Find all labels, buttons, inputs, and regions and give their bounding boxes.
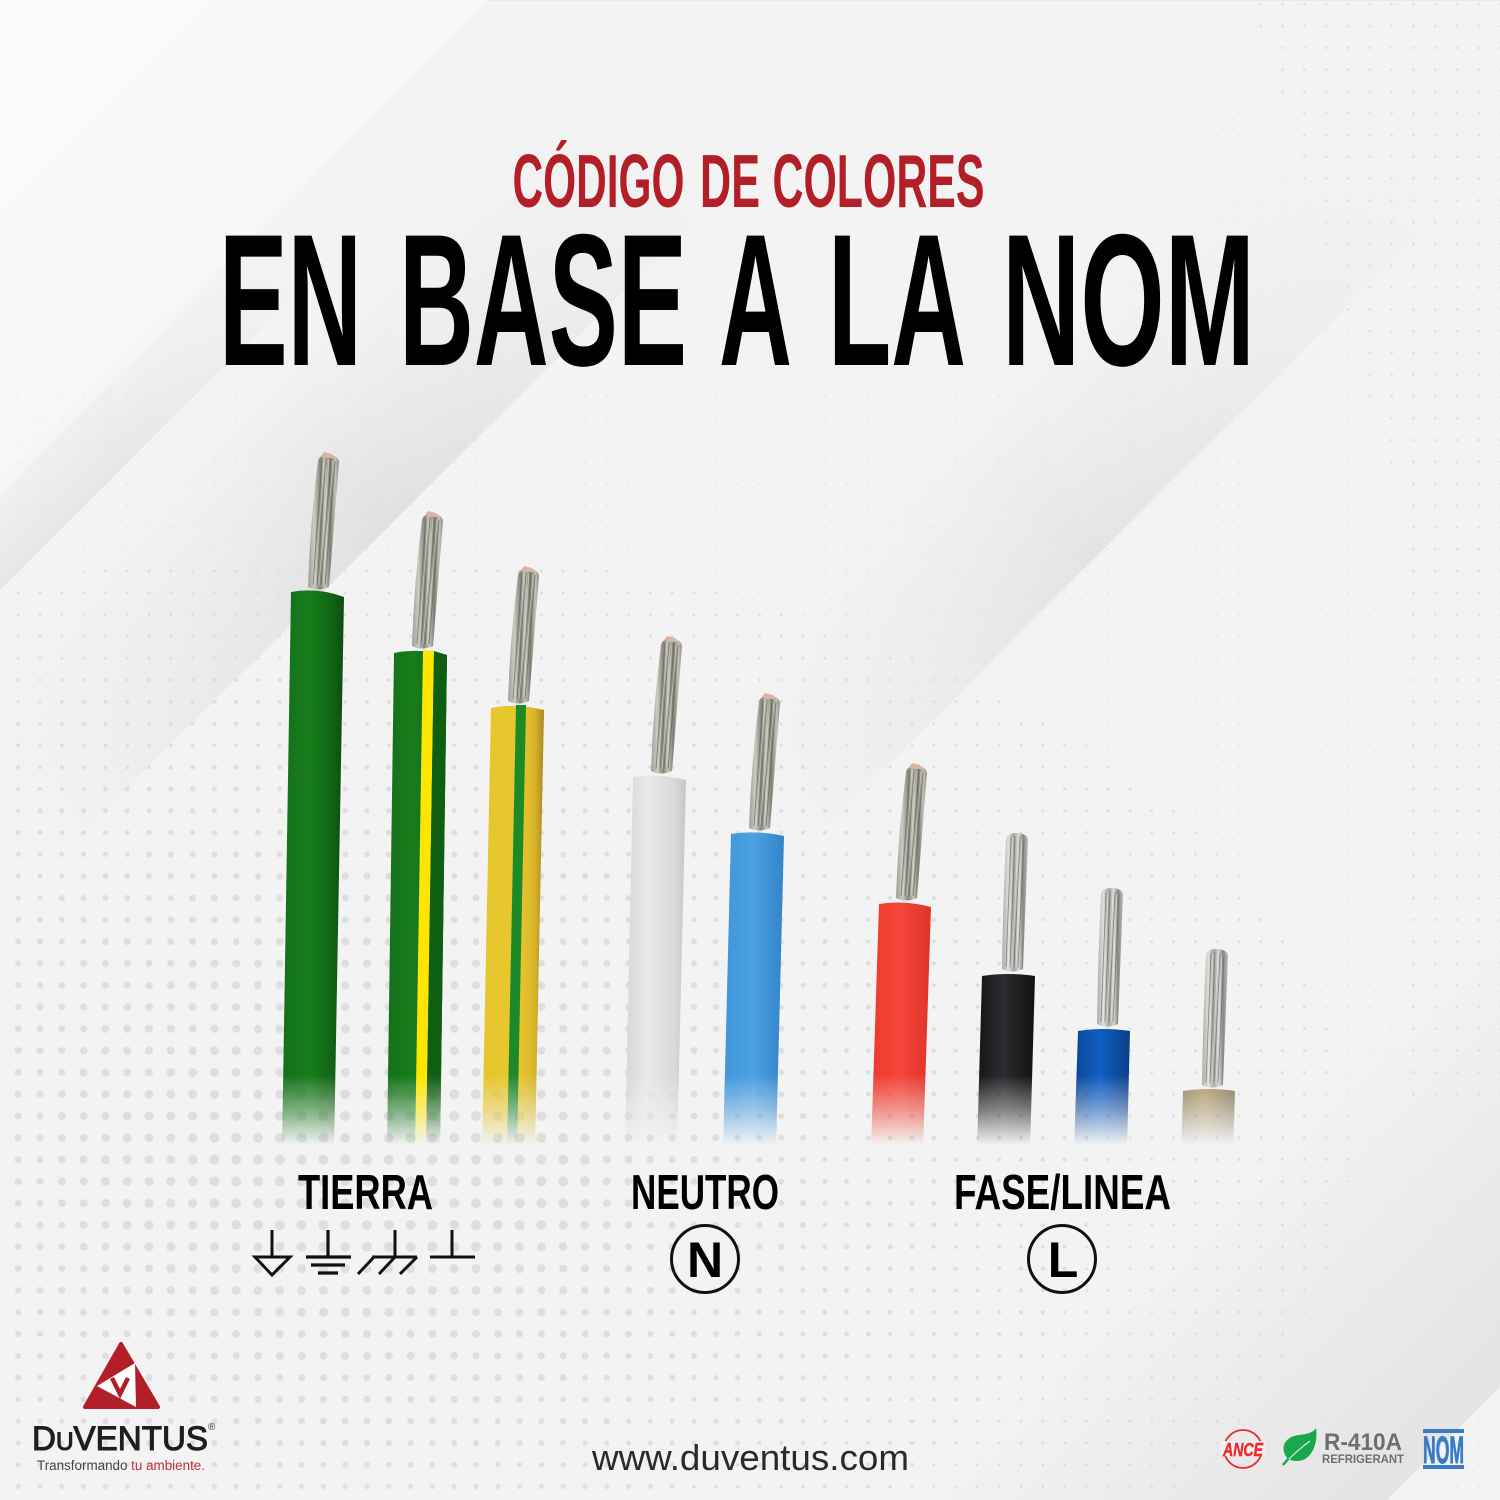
icon: n in circle xyxy=(672,1226,738,1292)
title: en base a la nom: NOM xyxy=(1002,195,1255,405)
cable: green with yellow stripe xyxy=(387,511,447,1150)
label: tierra: TIERRA xyxy=(298,1166,433,1220)
title: en base a la nom: A xyxy=(719,195,792,405)
icon: n in circle: N xyxy=(687,1232,723,1288)
badge: nom xyxy=(1423,1429,1464,1472)
title: código de colores: CÓDIGO xyxy=(512,139,684,223)
duventus logo xyxy=(32,1344,216,1473)
icon: ground symbols xyxy=(255,1230,475,1275)
cable: white xyxy=(625,636,686,1150)
label: fase/linea: FASE/LINEA xyxy=(954,1166,1171,1220)
icon: l in circle: L xyxy=(1048,1232,1078,1288)
title: en base a la nom: LA xyxy=(828,195,966,405)
title: en base a la nom: BASE xyxy=(399,195,687,405)
title: código de colores xyxy=(512,139,984,223)
badge: r-410a: R-410A xyxy=(1324,1429,1402,1456)
website url: www.duventus.com xyxy=(591,1437,909,1478)
badge: ance xyxy=(1221,1430,1265,1468)
cable: tan xyxy=(1181,949,1235,1155)
cable: light blue xyxy=(723,693,784,1150)
label: neutro: NEUTRO xyxy=(631,1166,779,1220)
tagline: Transformando tu ambiente. xyxy=(37,1458,205,1473)
badge: ance: ANCE xyxy=(1222,1440,1264,1460)
brand name: DUVENTUS xyxy=(32,1420,208,1458)
cable: dark blue xyxy=(1074,888,1130,1150)
title: en base a la nom: EN xyxy=(219,195,362,405)
title: en base a la nom xyxy=(219,195,1255,405)
cable: red xyxy=(871,763,931,1150)
icon: green leaf xyxy=(1283,1428,1316,1465)
badge: r-410a xyxy=(1322,1429,1405,1466)
cable: green xyxy=(282,452,344,1150)
icon: red triangle xyxy=(85,1344,158,1407)
registered mark: ® xyxy=(208,1422,216,1433)
cable samples xyxy=(282,452,1235,1155)
title: código de colores: DE xyxy=(700,139,760,223)
title: código de colores: COLORES xyxy=(772,139,984,223)
icon: l in circle xyxy=(1028,1226,1096,1292)
cable: black xyxy=(977,833,1035,1150)
refrigerant caption: REFRIGERANT xyxy=(1322,1452,1405,1466)
cable: yellow with green stripe xyxy=(482,566,544,1150)
